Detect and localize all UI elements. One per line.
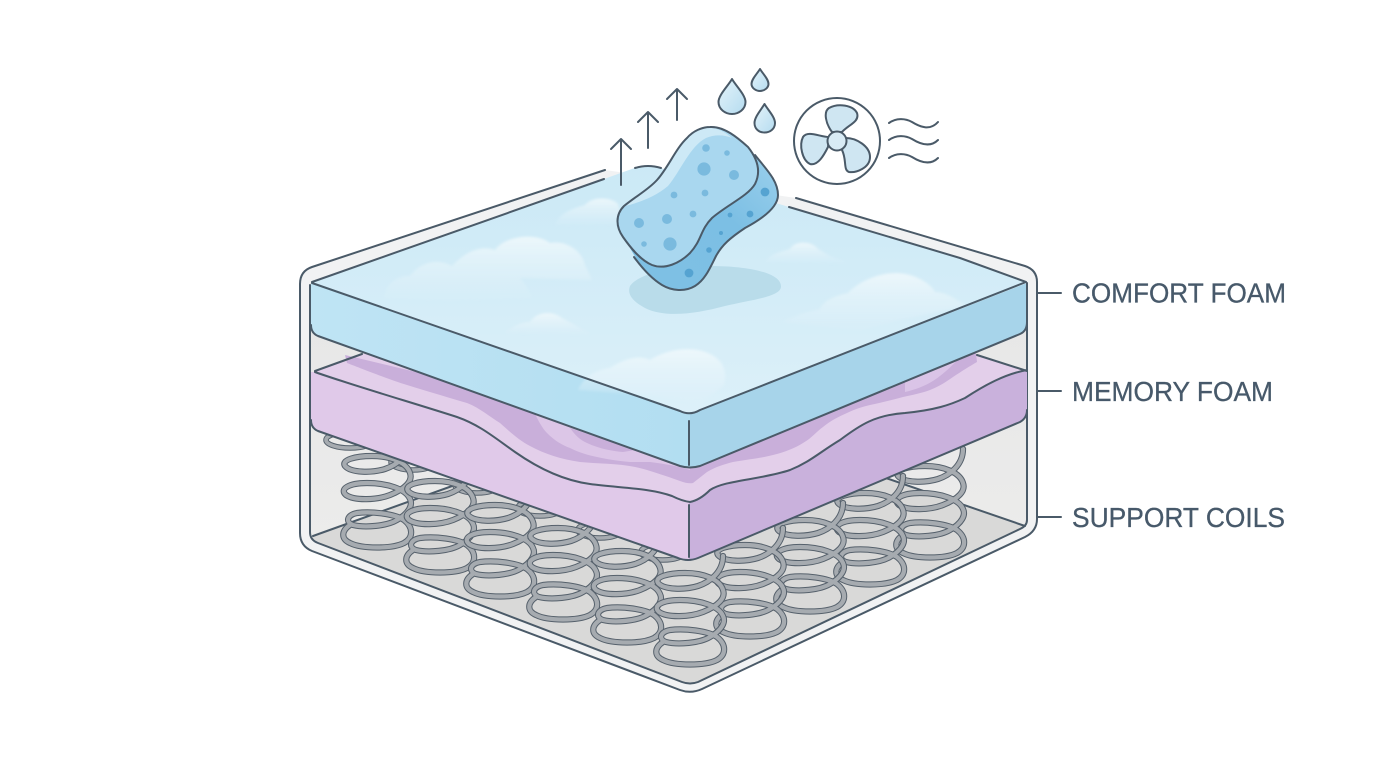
support coils (326, 432, 964, 664)
comfort foam layer (311, 165, 1027, 468)
sponge (618, 127, 781, 314)
icon: fan (794, 98, 880, 184)
mattress casing (300, 170, 1037, 692)
sponge shadow (629, 266, 781, 314)
label: support coils: SUPPORT COILS (1072, 502, 1285, 533)
icon: upward arrows (611, 89, 687, 185)
label: memory foam: MEMORY FOAM (1072, 376, 1273, 407)
label: comfort foam: COMFORT FOAM (1072, 278, 1286, 308)
light wedge on the memory foam dip (533, 410, 690, 470)
clouds (384, 198, 966, 404)
icon: airflow lines (889, 119, 938, 163)
icon: water drops (718, 69, 775, 132)
memory foam layer (311, 330, 1027, 561)
sponge pores (634, 144, 739, 251)
